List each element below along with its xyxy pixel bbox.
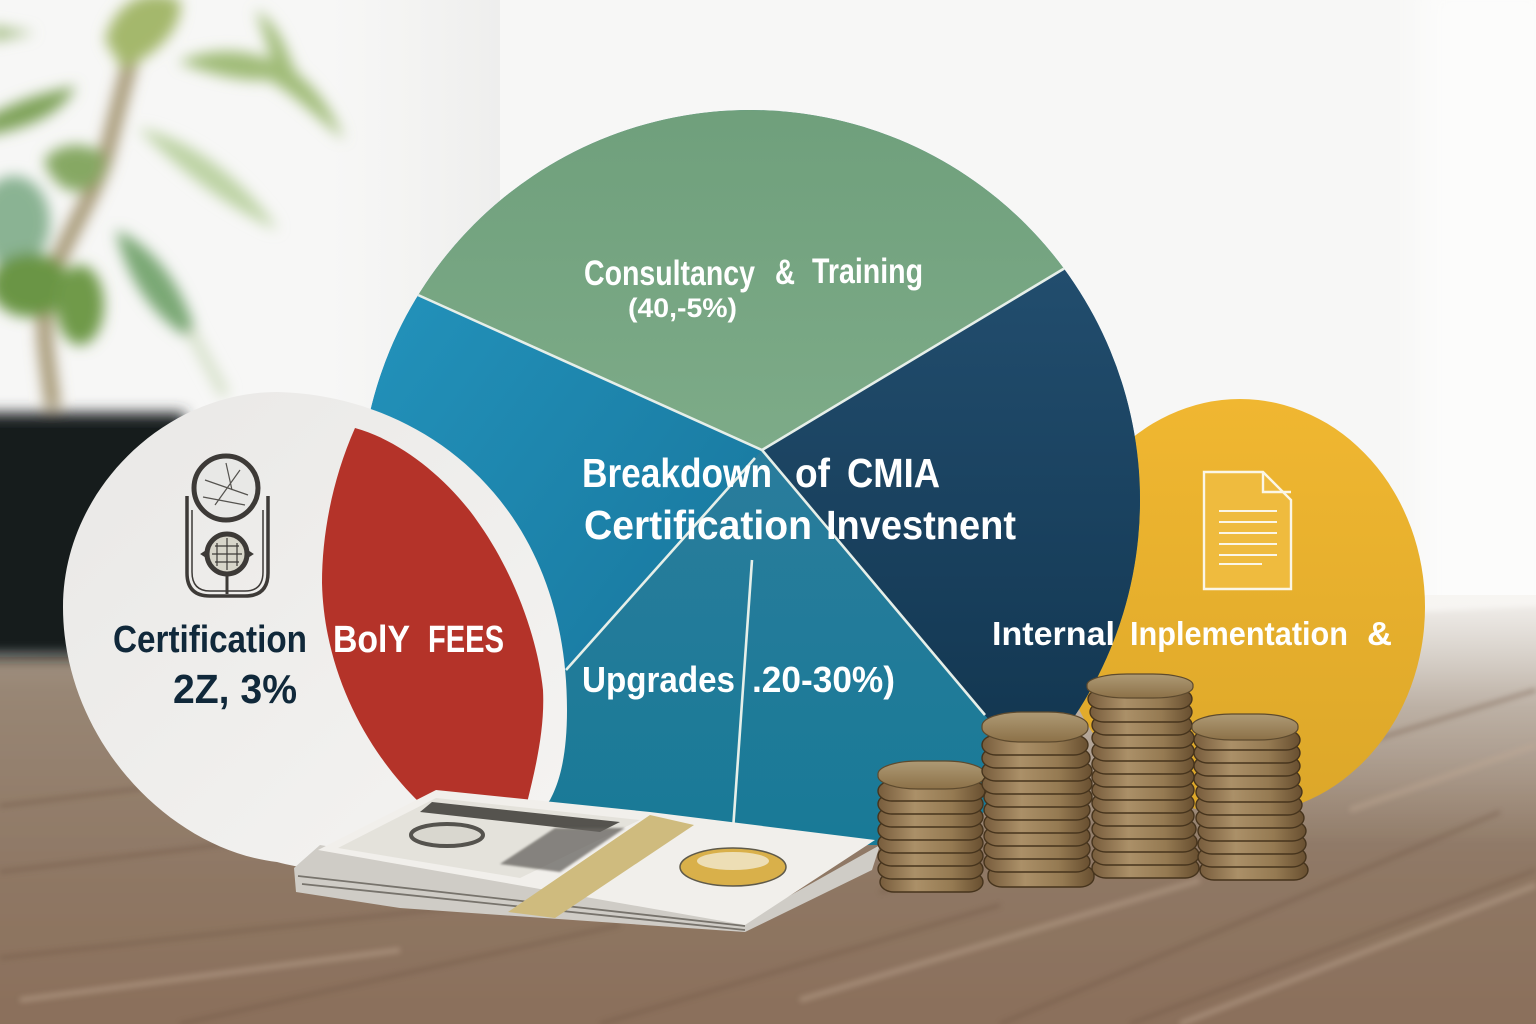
heading: consultancy and training <box>584 252 923 293</box>
pie slice: certification investment left <box>370 295 761 670</box>
red segment <box>322 428 543 803</box>
title line one: Breakdown <box>582 450 772 496</box>
label: upgrades: Upgrades <box>582 659 735 700</box>
stack of banknotes <box>294 790 880 932</box>
icon: document <box>1204 472 1291 589</box>
pie slice: dark navy right <box>764 269 1140 718</box>
coin stack one <box>878 761 985 892</box>
gold seal <box>680 848 786 886</box>
coin stack four <box>1192 714 1308 880</box>
banknote seal <box>411 824 483 846</box>
label: percentage: 2Z, 3% <box>173 666 297 712</box>
title line one: CMIA <box>847 450 940 496</box>
background wall <box>0 0 1536 700</box>
icon: compass and globe <box>187 456 268 596</box>
coin stacks <box>878 674 1308 892</box>
white disc: certification body fees <box>63 392 567 872</box>
title line two <box>584 502 1016 548</box>
label: internal implementation: & <box>1367 615 1392 652</box>
pie slice: consultancy and training <box>418 110 1064 448</box>
title line one <box>582 450 940 496</box>
title line two: Certification <box>584 502 812 548</box>
label: certification: Certification <box>113 619 307 661</box>
coin stack three <box>1087 674 1199 878</box>
main pie chart <box>370 110 1140 845</box>
label: internal implementation <box>992 615 1392 652</box>
left banknote <box>318 790 875 925</box>
blurred plant <box>0 0 344 657</box>
heading: consultancy and training: & <box>775 253 795 292</box>
label: body fees: FEES <box>428 619 504 661</box>
paper band <box>508 815 694 918</box>
pie labels <box>582 252 1392 700</box>
label: body fees <box>333 619 504 661</box>
yellow disc: internal implementation <box>1055 399 1425 815</box>
title line one: of <box>795 450 830 496</box>
heading: consultancy and training: Consultancy <box>584 254 755 293</box>
wooden table <box>0 595 1536 1024</box>
coin stack two <box>982 712 1094 887</box>
value: consultancy percent: (40,-5%) <box>628 293 737 323</box>
label: upgrades: .20-30%) <box>752 659 895 700</box>
label: internal implementation: Inplementation <box>1130 615 1348 652</box>
heading: consultancy and training: Training <box>812 252 923 291</box>
slice dividers <box>418 268 1065 830</box>
label: body fees: BolY <box>333 619 410 661</box>
pie slice: upgrades lower teal <box>549 451 988 845</box>
title line two: Investnent <box>826 502 1016 548</box>
label: internal implementation: Internal <box>992 615 1115 652</box>
label: upgrades <box>582 659 895 700</box>
